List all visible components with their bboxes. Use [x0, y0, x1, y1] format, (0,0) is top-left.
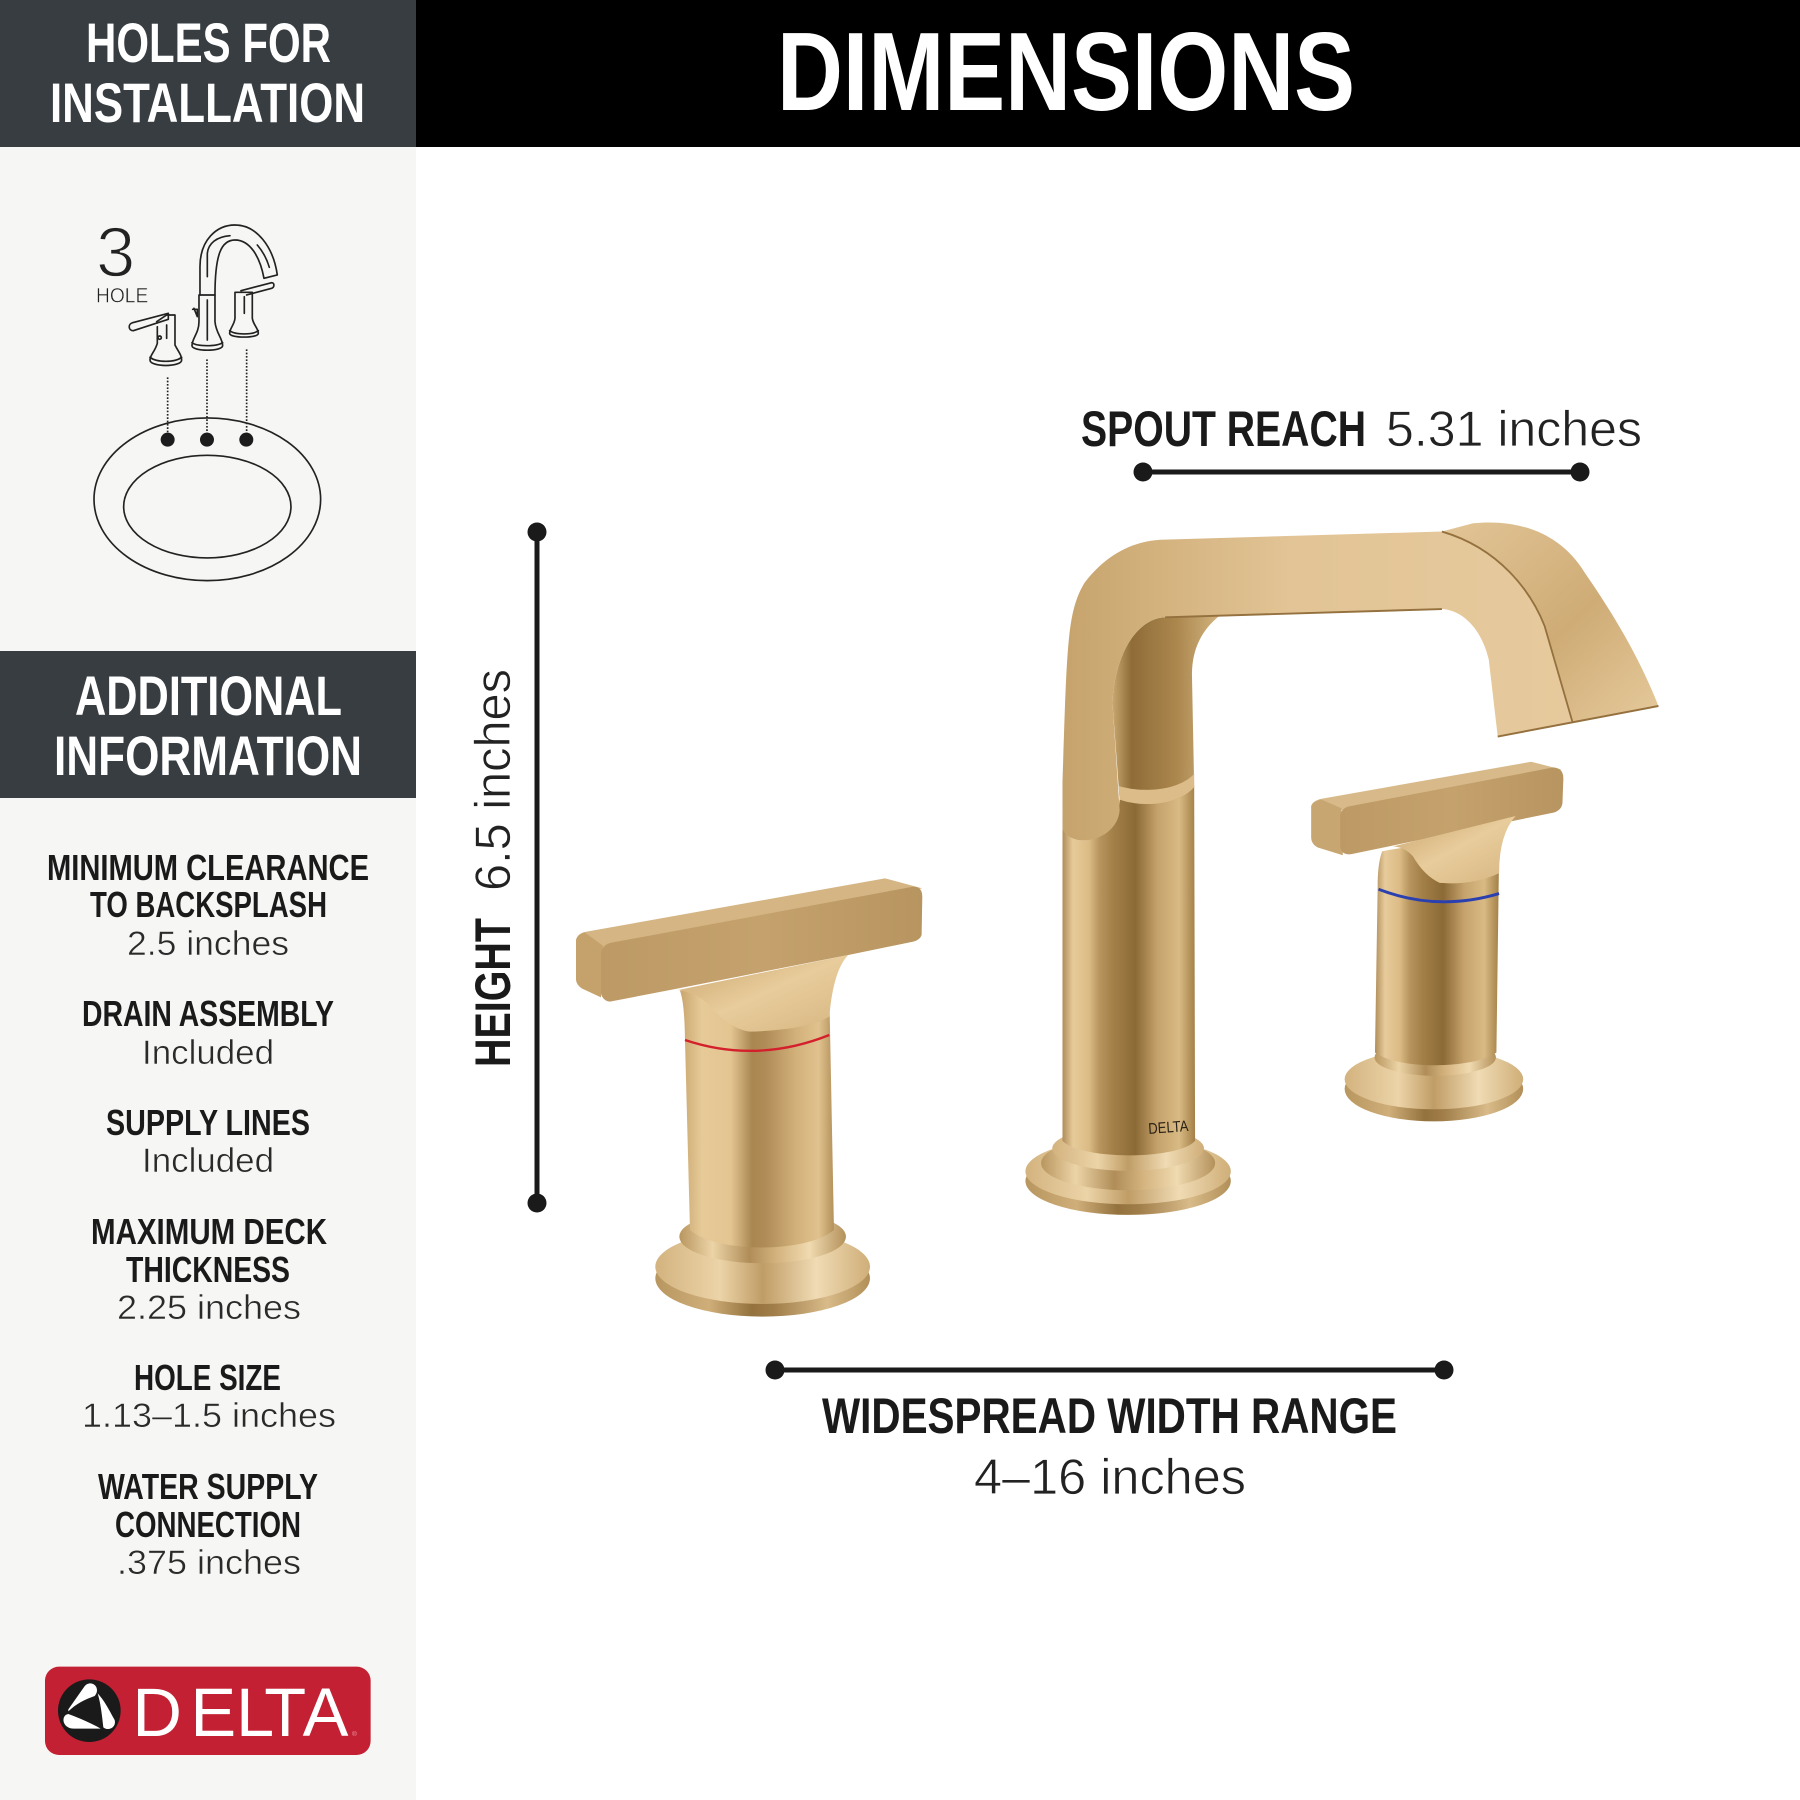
heading: holes for installation	[0, 0, 416, 147]
icon: three hole faucet and sink diagram	[94, 213, 321, 581]
spec: minimum clearance: MINIMUM CLEARANCE	[47, 847, 369, 888]
faucet column	[1062, 786, 1195, 1155]
heading: additional information: ADDITIONAL	[75, 664, 342, 727]
spec: water supply connection: CONNECTION	[115, 1504, 301, 1545]
spec: maximum deck thickness	[91, 1211, 327, 1327]
logo: delta: DELTA	[132, 1674, 349, 1751]
faucet spout right face	[1442, 522, 1658, 723]
product: left handle	[576, 878, 922, 1317]
faucet spout front face	[1062, 532, 1573, 840]
dimension: widespread width range	[766, 1360, 1454, 1505]
right handle base	[1345, 1039, 1523, 1121]
faucet inner face of arch	[1112, 616, 1219, 804]
spec: hole size: 1.13–1.5 inches	[82, 1397, 336, 1435]
faucet brand mark: DELTA	[1148, 1118, 1189, 1138]
heading: holes for installation: HOLES FOR	[86, 11, 331, 74]
dimension: spout reach: 5.31 inches	[1386, 401, 1642, 457]
icon: sink outline	[94, 418, 321, 581]
icon label: 3 hole	[96, 213, 148, 307]
spec: supply lines	[106, 1102, 310, 1180]
faucet base	[1025, 1126, 1231, 1215]
spec: water supply connection	[98, 1466, 318, 1582]
dimension: widespread width range: 4–16 inches	[974, 1449, 1246, 1505]
dimension: widespread width range: WIDESPREAD WIDTH RANGE	[822, 1388, 1397, 1444]
header: dimensions black bar	[416, 0, 1800, 147]
icon label: 3 hole: HOLE	[96, 282, 148, 307]
dimension: spout reach: SPOUT REACH	[1081, 401, 1366, 457]
left handle cylinder	[680, 991, 834, 1247]
left handle lever	[576, 878, 922, 1032]
faucet spout edge line	[1165, 532, 1658, 737]
spec: maximum deck thickness: THICKNESS	[126, 1249, 290, 1290]
right handle blue indicator	[1379, 889, 1499, 902]
spec: drain assembly: DRAIN ASSEMBLY	[82, 993, 334, 1034]
spec: maximum deck thickness: 2.25 inches	[117, 1289, 301, 1327]
spec: minimum clearance	[47, 847, 369, 963]
heading: additional information: INFORMATION	[54, 724, 362, 787]
right handle lever	[1311, 762, 1563, 883]
icon: line art spout	[192, 225, 277, 350]
left handle red indicator	[685, 1035, 829, 1051]
spec: minimum clearance: TO BACKSPLASH	[90, 884, 327, 925]
spec: hole size: HOLE SIZE	[134, 1357, 281, 1398]
heading: holes for installation: INSTALLATION	[50, 71, 365, 134]
left handle base	[655, 1210, 870, 1317]
spec: minimum clearance: 2.5 inches	[127, 925, 289, 963]
spec: hole size	[82, 1357, 336, 1435]
icon: dotted guide lines	[168, 349, 247, 433]
dimension: height: 6.5 inches	[465, 669, 521, 891]
spec: drain assembly: Included	[142, 1034, 274, 1072]
logo: delta: ®	[352, 1730, 357, 1738]
dimension: spout reach	[1081, 401, 1642, 482]
title: DIMENSIONS	[777, 10, 1355, 134]
spec: maximum deck thickness: MAXIMUM DECK	[91, 1211, 327, 1252]
icon: line art right handle	[230, 283, 274, 337]
spec: water supply connection: .375 inches	[117, 1544, 301, 1582]
icon: mounting holes	[161, 433, 253, 447]
icon label: 3 hole: 3	[96, 213, 135, 292]
spec: supply lines: Included	[142, 1142, 274, 1180]
heading: additional information	[0, 651, 416, 798]
panel: left sidebar background	[0, 0, 416, 1800]
spec: drain assembly	[82, 993, 334, 1072]
spec: water supply connection: WATER SUPPLY	[98, 1466, 318, 1507]
icon: line art left handle	[129, 313, 182, 365]
product: faucet spout and right handle	[1025, 522, 1658, 1215]
dimension: height: HEIGHT	[465, 918, 521, 1067]
faucet collar highlight	[1119, 774, 1194, 804]
spec: supply lines: SUPPLY LINES	[106, 1102, 310, 1143]
right handle cylinder	[1375, 846, 1499, 1065]
logo: delta	[45, 1667, 371, 1755]
dimension: height	[465, 522, 546, 1212]
